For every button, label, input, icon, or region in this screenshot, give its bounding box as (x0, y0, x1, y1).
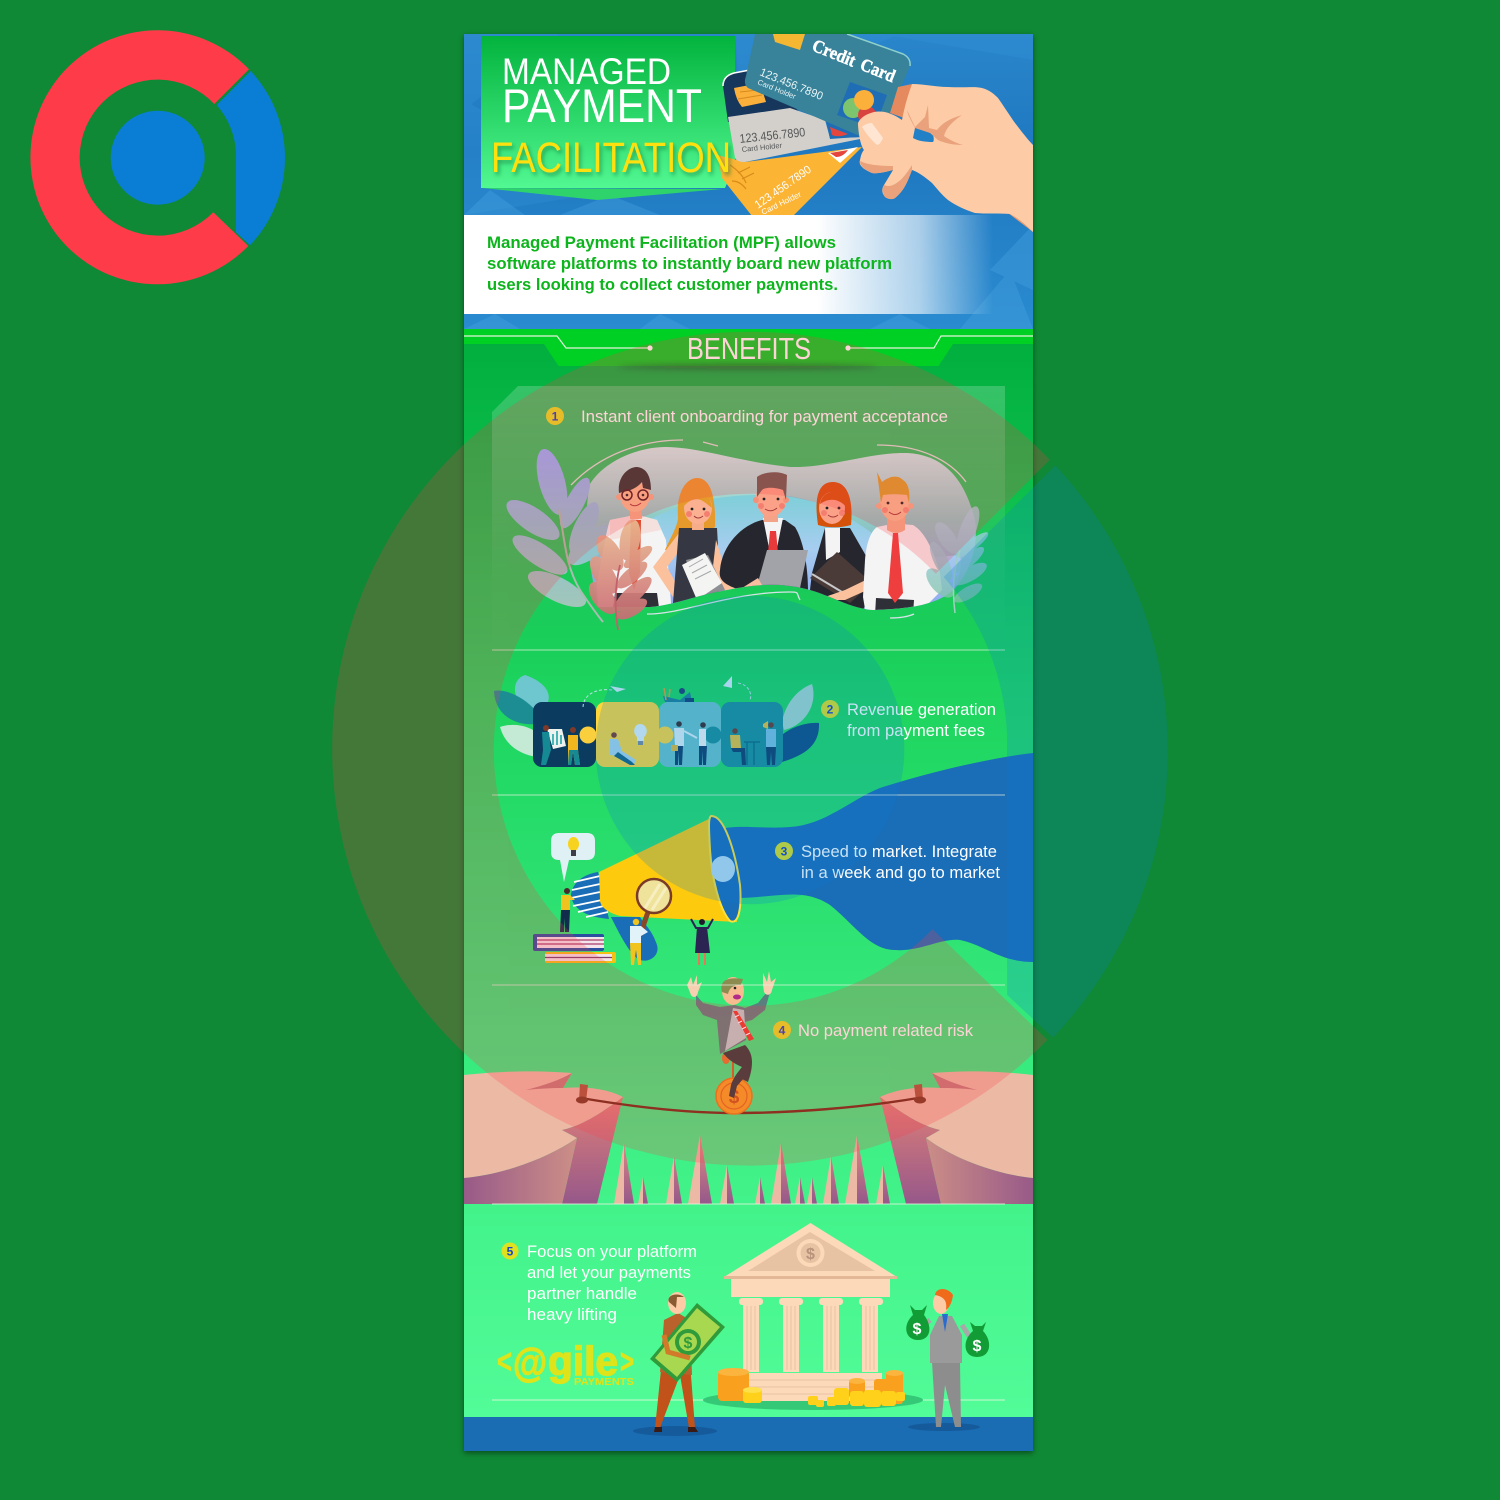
coral plant (588, 519, 652, 630)
person 1 (597, 467, 672, 615)
benefit 3 (533, 816, 1000, 965)
agile payments logo (497, 1338, 634, 1388)
person 5 (863, 472, 942, 615)
badge 2 (821, 700, 839, 718)
tightrope scene (464, 971, 1033, 1204)
credit cards illustration (717, 34, 910, 217)
right plant (926, 506, 988, 614)
person 4 (810, 482, 866, 609)
divider 5 (492, 1399, 1005, 1401)
man carrying banknote: $ (684, 1335, 693, 1352)
benefit 5 (497, 1223, 989, 1436)
divider 2 (492, 794, 1005, 796)
bottom blue band (464, 1417, 1033, 1451)
benefits heading banner (464, 329, 1033, 370)
navy card (723, 70, 800, 122)
agile payments logo: > (620, 1343, 634, 1381)
bank illustration (703, 1223, 923, 1410)
megaphone cone (599, 816, 737, 922)
teal credit card: Card Holder (756, 78, 798, 101)
benefit 1 text: Instant client onboarding for payment acceptance (581, 407, 948, 426)
divider 4 (492, 1203, 1005, 1205)
agile payments logo: gile (548, 1338, 618, 1384)
badge 1: 1 (552, 410, 559, 424)
benefit 4 text: No payment related risk (798, 1021, 973, 1040)
badge 5 (502, 1242, 518, 1260)
man with money bags: $ (973, 1338, 982, 1355)
logo: corner brand mark (30, 30, 285, 284)
benefit 5 text: Focus on your platform (527, 1242, 697, 1261)
benefit 4 (464, 971, 1033, 1204)
header panel (464, 34, 1033, 329)
badge 2: 2 (827, 702, 834, 716)
unicycle man: $ (729, 1087, 740, 1108)
large translucent logo watermark (332, 332, 1168, 1166)
benefit 2 (494, 675, 996, 767)
infographic card backing (464, 34, 1033, 1451)
white intro band (464, 215, 1033, 314)
title box (481, 36, 735, 200)
title text: MANAGED (502, 51, 671, 92)
team of five people (597, 467, 942, 615)
rope and posts (576, 1084, 926, 1113)
benefit 3 text: Speed to market. Integrate (801, 842, 997, 861)
puzzle illustration (494, 675, 819, 767)
divider 1 (492, 650, 1005, 651)
stacked books (533, 934, 616, 963)
spikes (614, 1135, 890, 1204)
person with raised arms (691, 919, 713, 965)
benefit 3 text (801, 842, 1000, 882)
benefit 2 text: Revenue generation (847, 700, 996, 719)
hand (858, 84, 1033, 232)
megaphone mouth (709, 816, 741, 922)
megaphone back (571, 872, 609, 919)
left leaves (494, 675, 549, 757)
benefit 5 text: heavy lifting (527, 1305, 617, 1324)
agile payments logo: < (497, 1343, 512, 1381)
left cliff (464, 1071, 623, 1204)
bank illustration: $ (806, 1246, 815, 1263)
agile payments logo: PAYMENTS (574, 1376, 634, 1388)
title text: PAYMENT (502, 79, 702, 132)
right cliff (880, 1071, 1033, 1204)
coin stacks (718, 1368, 905, 1407)
man with money bags (906, 1289, 989, 1431)
man with money bags: $ (913, 1321, 922, 1338)
puzzle pieces (659, 702, 721, 767)
benefits title: BENEFITS (687, 331, 811, 366)
badge 4: 4 (779, 1024, 786, 1038)
badge 3 (775, 842, 793, 860)
benefit 1 (500, 407, 995, 633)
badge 4 (773, 1021, 791, 1039)
teal credit card: Card (858, 54, 898, 86)
benefit 5 text: and let your payments (527, 1263, 691, 1282)
benefit panel backdrop (492, 386, 1005, 564)
person on books (560, 888, 575, 932)
person holding glass (630, 919, 648, 965)
teal credit card: Credit (810, 35, 859, 71)
benefit 2 text (847, 700, 996, 740)
teal credit card: 123.456.7890 (758, 67, 824, 103)
title text (491, 51, 731, 182)
magnifying glass (637, 879, 671, 935)
figures on pieces (541, 721, 776, 765)
team illustration (500, 440, 995, 633)
body background (464, 329, 1033, 1417)
yellow card: 123.456.7890 (753, 164, 814, 211)
right leaves (782, 684, 819, 762)
intro text (487, 233, 892, 294)
blue tail shape (611, 917, 658, 961)
unicycle man (687, 971, 776, 1114)
badge 1 (546, 407, 564, 425)
person 2 (653, 478, 744, 603)
man carrying banknote (633, 1292, 725, 1436)
grey card (728, 108, 872, 162)
badge 3: 3 (781, 844, 788, 858)
agile payments logo: @ (513, 1341, 547, 1385)
yellow card (717, 147, 862, 217)
benefit 5 text (527, 1242, 697, 1324)
megaphone illustration (533, 816, 741, 965)
divider 3 (492, 984, 1005, 986)
badge 5: 5 (507, 1244, 514, 1258)
teal credit card (745, 34, 910, 137)
benefit 2 text: from payment fees (847, 721, 985, 740)
benefit 5 text: partner handle (527, 1284, 637, 1303)
intro text: users looking to collect customer payments. (487, 275, 838, 294)
intro text: Managed Payment Facilitation (MPF) allows (487, 233, 836, 252)
grey card: 123.456.7890 (739, 125, 806, 146)
paper planes and reclining figure (583, 676, 751, 708)
blue ribbon (725, 753, 1033, 962)
benefit 3 text: in a week and go to market (801, 863, 1000, 882)
person 3 (720, 472, 808, 600)
speech bubble with bulb (551, 833, 595, 882)
intro text: software platforms to instantly board new platform (487, 254, 892, 273)
grey card: Card Holder (741, 141, 783, 154)
infographic content (464, 34, 1033, 1451)
yellow card: Card Holder (760, 190, 803, 217)
title text: FACILITATION (491, 134, 731, 182)
left plant (506, 449, 608, 623)
